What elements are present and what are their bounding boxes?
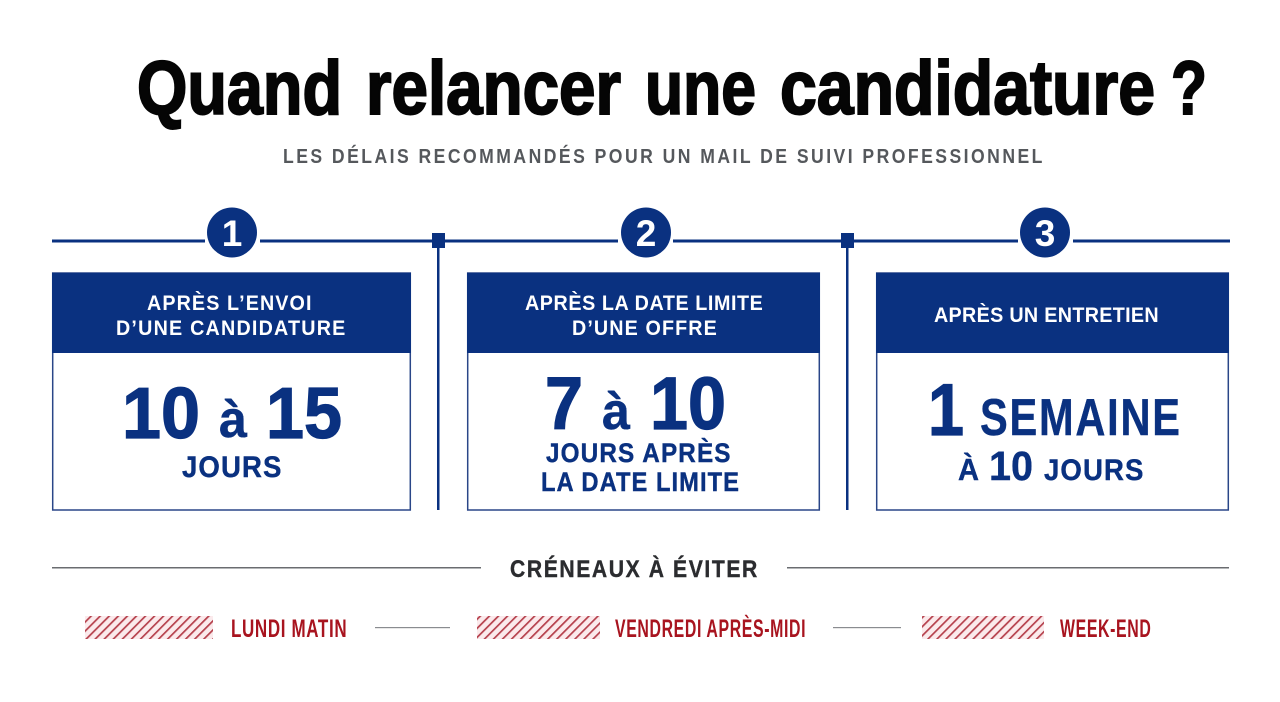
title: une — [645, 46, 756, 131]
title — [137, 46, 1207, 131]
panel 2 heading — [525, 291, 763, 340]
panel 2 unit — [541, 438, 739, 497]
panel 1 value: 10 — [122, 374, 200, 454]
title: ? — [1171, 46, 1207, 131]
panel 2 value: 7 — [545, 362, 583, 445]
subtitle: LES DÉLAIS RECOMMANDÉS POUR UN MAIL DE SUIVI PROFESSIONNEL — [283, 145, 1042, 167]
step badge 1 — [207, 208, 257, 258]
section heading: créneaux à éviter: CRÉNEAUX À ÉVITER — [510, 556, 757, 582]
panel 1 heading: APRÈS L’ENVOI — [147, 291, 311, 315]
panel 2 value — [545, 362, 726, 445]
step badge 2: 2 — [636, 213, 656, 254]
slot: week-end — [922, 616, 1151, 643]
title: relancer — [366, 46, 621, 131]
panel: après l'envoi — [52, 273, 411, 510]
panel 3 unit: À — [958, 452, 979, 487]
vertical divider right — [846, 243, 848, 510]
panel 2 heading: APRÈS LA DATE LIMITE — [525, 291, 763, 315]
step badge 3 — [1020, 208, 1070, 258]
slot: lundi matin — [85, 615, 347, 643]
panel 2 unit: LA DATE LIMITE — [541, 468, 739, 497]
panel 3 unit: JOURS — [1044, 454, 1143, 487]
panel 2 heading: D’UNE OFFRE — [572, 317, 717, 340]
panel 2 value: à — [602, 383, 631, 441]
title: candidature — [780, 46, 1155, 131]
vertical divider left — [437, 243, 440, 510]
step badge 2 — [621, 208, 671, 258]
panel: après un entretien — [876, 273, 1229, 510]
panel 2 value: 10 — [650, 362, 726, 445]
title: Quand — [137, 46, 342, 131]
panel 1 heading — [116, 291, 345, 340]
panel 1 heading: D’UNE CANDIDATURE — [116, 317, 345, 340]
panel: après la date limite — [467, 273, 820, 510]
panel 1 unit: JOURS — [182, 451, 281, 484]
slot: vendredi après-midi: VENDREDI APRÈS-MIDI — [615, 616, 806, 643]
panel 3 value — [928, 370, 1180, 451]
panel 3 value: SEMAINE — [980, 388, 1180, 446]
slot: lundi matin: LUNDI MATIN — [231, 615, 347, 643]
panel 3 heading: APRÈS UN ENTRETIEN — [934, 303, 1159, 327]
timeline — [52, 233, 1230, 510]
step badge 1: 1 — [222, 213, 242, 254]
panel 1 value — [122, 374, 342, 454]
timeline node left — [432, 233, 445, 248]
panel 1 value: à — [219, 391, 248, 449]
step badge 3: 3 — [1035, 213, 1055, 254]
panel 3 unit — [958, 443, 1143, 489]
slot: vendredi après-midi — [477, 616, 806, 643]
panel 2 unit: JOURS APRÈS — [546, 438, 731, 468]
timeline node right — [841, 233, 854, 248]
slot: week-end: WEEK-END — [1060, 616, 1151, 643]
panel 3 unit: 10 — [989, 443, 1033, 489]
panel 3 value: 1 — [928, 370, 964, 451]
panel 1 value: 15 — [266, 374, 342, 454]
